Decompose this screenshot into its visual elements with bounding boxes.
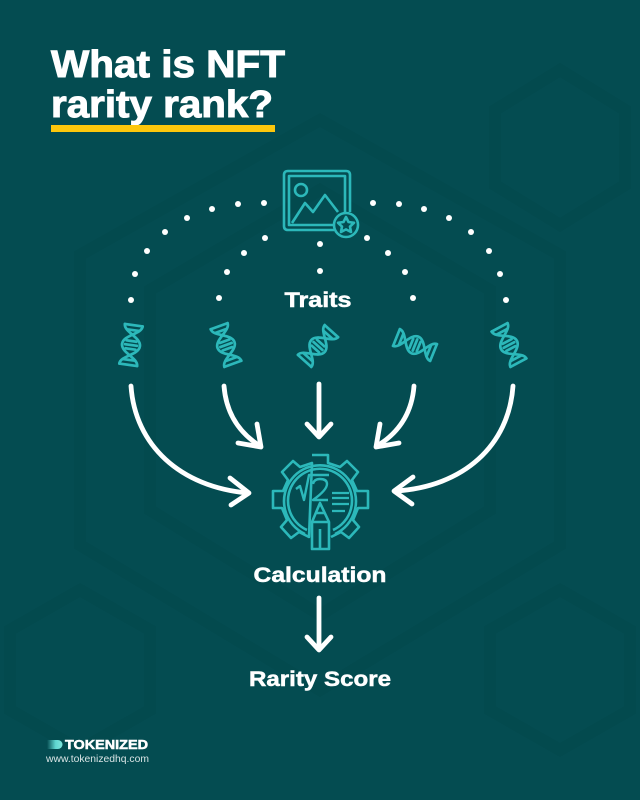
title: What is NFT (51, 44, 285, 86)
logo: www.tokenizedhq.com (45, 754, 149, 765)
arrows into calculation (131, 384, 513, 505)
icon: dna 4 (393, 329, 437, 361)
icon: calculation gear (273, 455, 368, 549)
title: rarity rank? (51, 84, 273, 126)
arrow down to score (307, 598, 331, 650)
icon: dna 3 (298, 325, 338, 367)
icon: image with star (284, 171, 358, 237)
Traits label: Traits (284, 289, 352, 312)
Calculation label: Calculation (254, 564, 386, 587)
logo (45, 738, 149, 765)
icon: dna 1 (119, 324, 143, 366)
title (51, 44, 285, 126)
title underline (51, 125, 275, 132)
dotted arcs (128, 200, 509, 303)
Rarity Score label: Rarity Score (249, 668, 391, 691)
icon: dna 2 (211, 323, 241, 367)
logo: TOKENIZED (65, 738, 148, 752)
icon: dna 5 (492, 323, 526, 367)
